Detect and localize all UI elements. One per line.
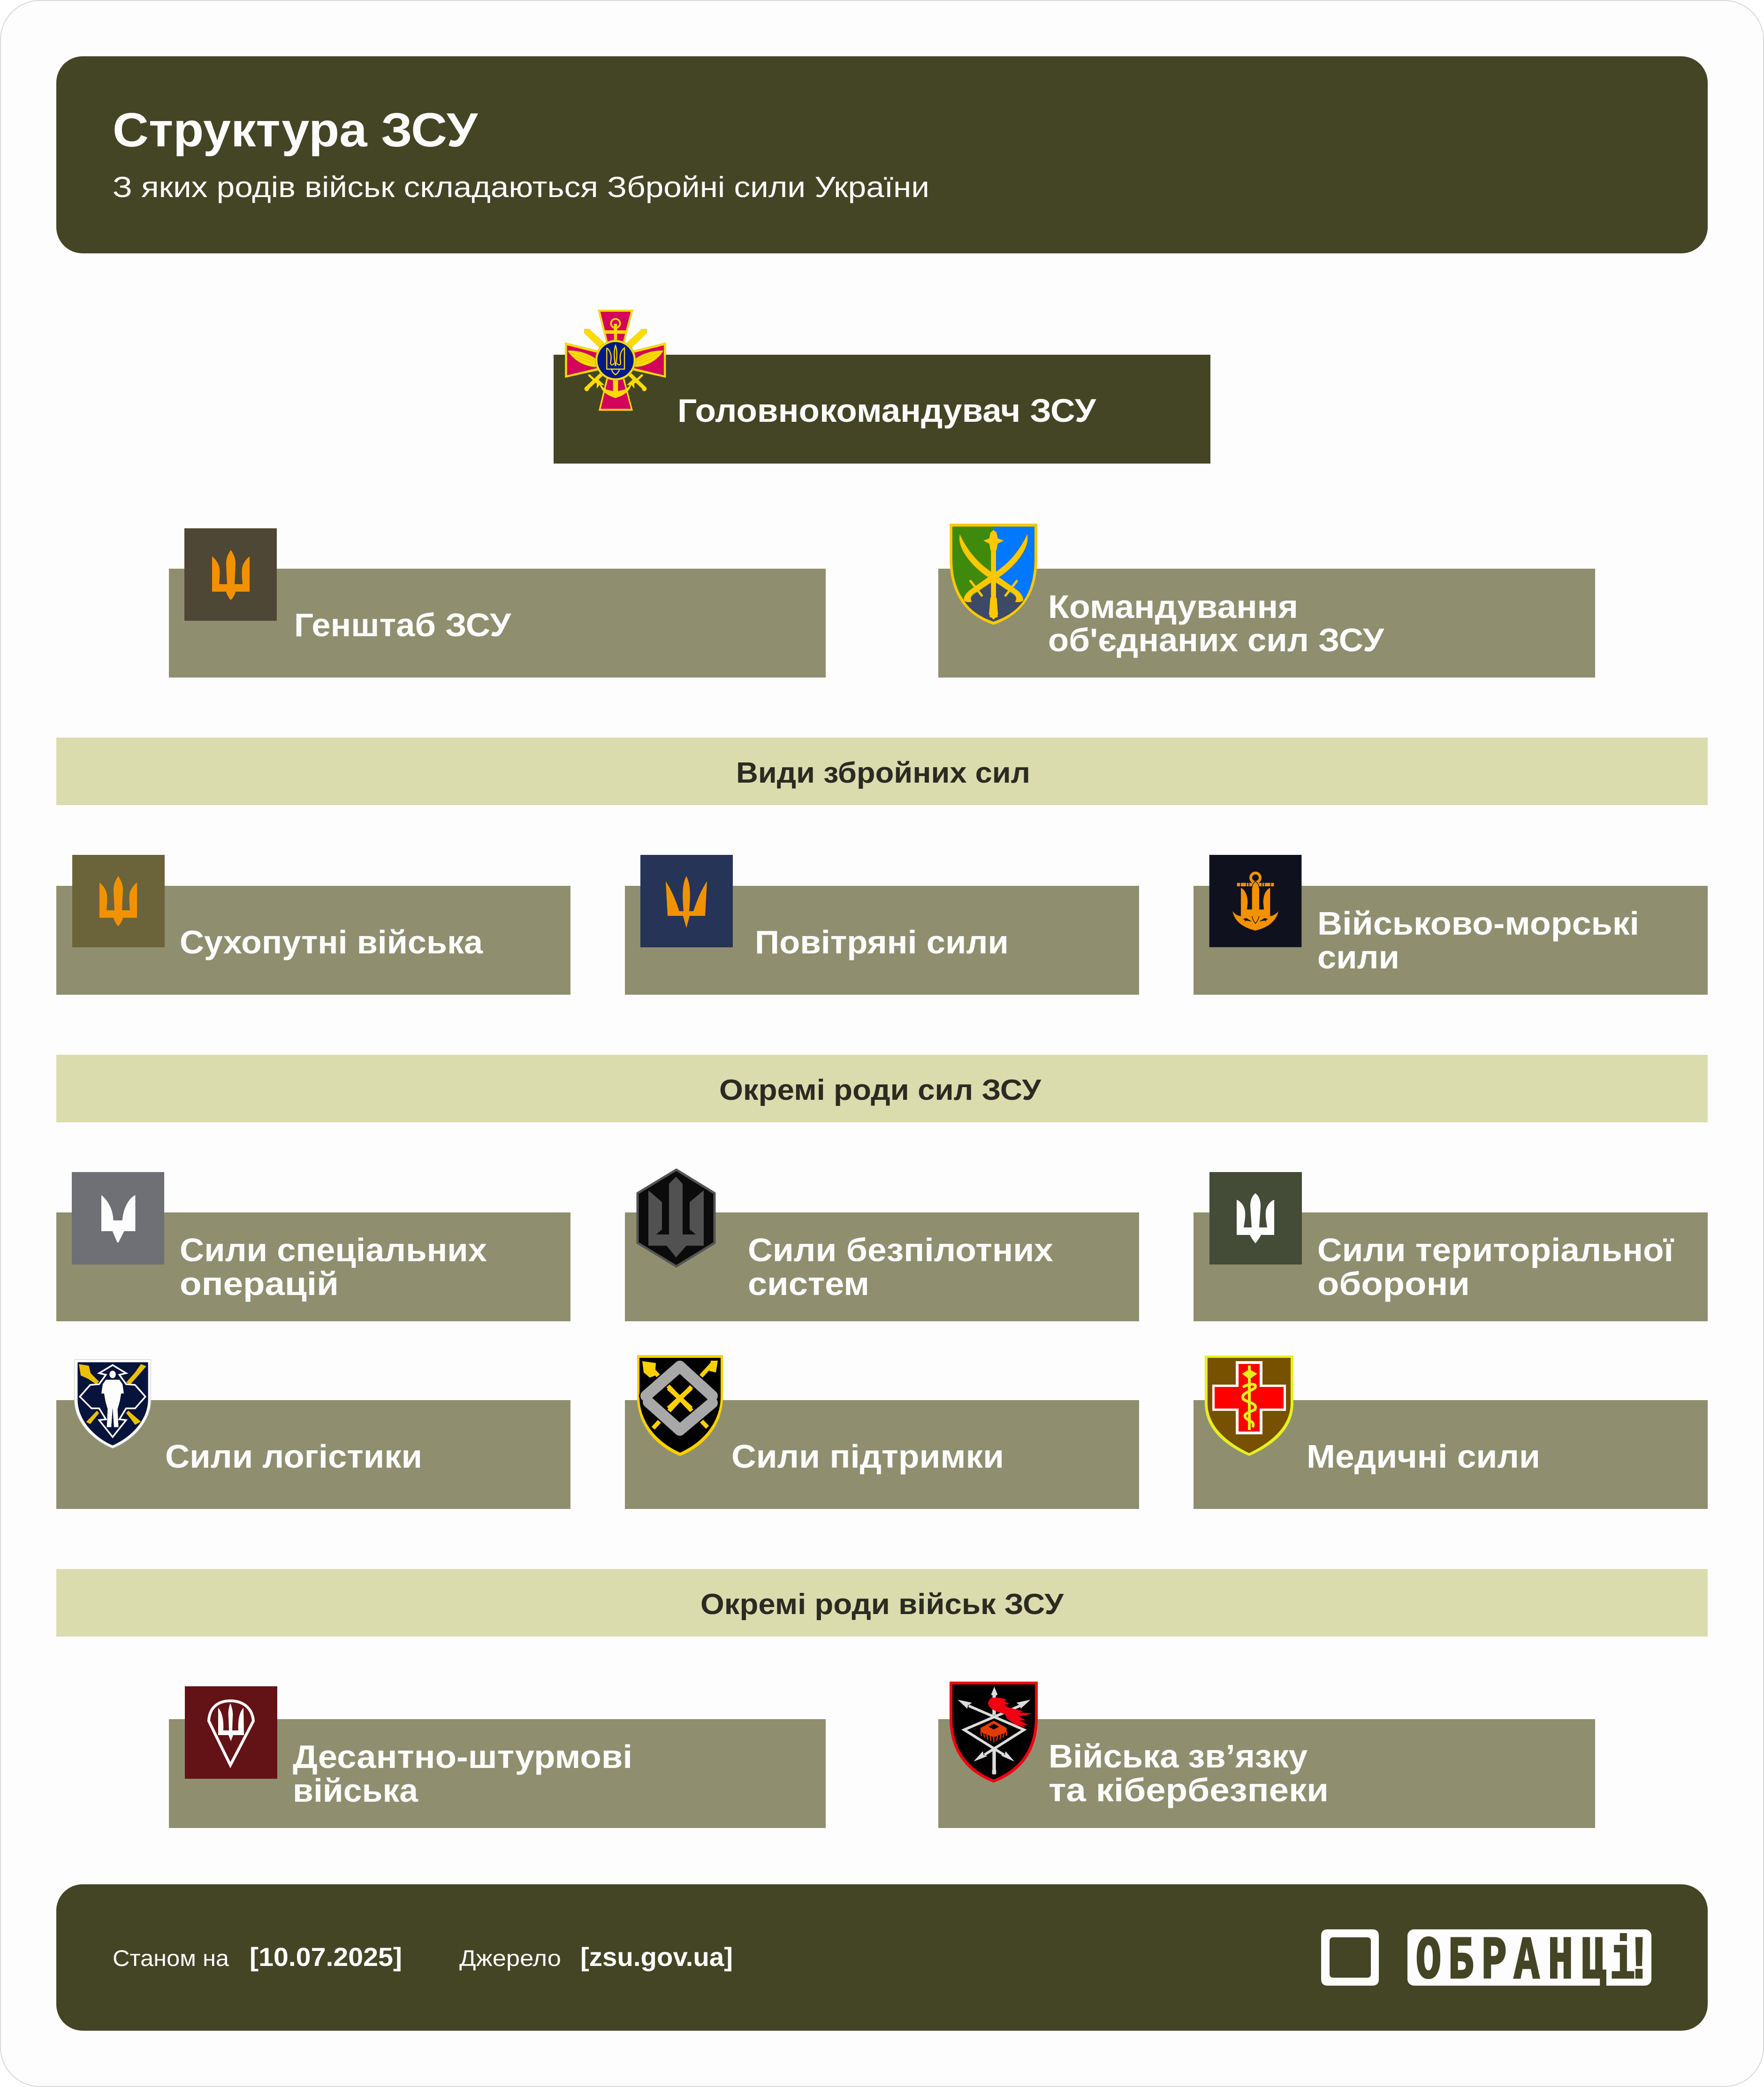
title: Структура ЗСУ — [113, 103, 479, 157]
joint forces label: Командування — [1048, 588, 1298, 625]
panel: logistics forces — [56, 1359, 570, 1509]
unmanned bar — [625, 1212, 1139, 1321]
panel: joint forces command — [938, 524, 1595, 678]
header banner — [56, 56, 1708, 253]
logistics label: Сили логістики — [165, 1438, 422, 1475]
territorial defence label: Сили територіальної — [1317, 1232, 1674, 1268]
logistics bar — [56, 1400, 570, 1509]
date value: [10.07.2025] — [250, 1942, 402, 1972]
territorial defence label line 2: оборони — [1317, 1265, 1470, 1302]
panel: support forces — [625, 1355, 1139, 1509]
communications bar — [938, 1719, 1595, 1828]
air assault bar — [169, 1719, 826, 1828]
source value: [zsu.gov.ua] — [580, 1942, 733, 1972]
general staff bar — [169, 569, 826, 678]
land forces bar — [56, 886, 570, 995]
icon: unmanned systems hexagon — [638, 1170, 715, 1266]
medical bar — [1194, 1400, 1708, 1509]
panel: navy — [1194, 855, 1708, 995]
source label: Джерело — [459, 1946, 561, 1971]
joint forces label line 2: об'єднаних сил ЗСУ — [1048, 622, 1385, 658]
joint forces bar — [938, 569, 1595, 678]
commander label: Головнокомандувач ЗСУ — [677, 392, 1097, 429]
panel: air assault forces — [169, 1686, 826, 1828]
section heading: separate branches of troops: Окремі роди військ ЗСУ — [700, 1588, 1064, 1621]
navy label line 2: сили — [1317, 939, 1399, 975]
header background — [56, 56, 1708, 253]
air assault label line 2: війська — [293, 1772, 418, 1809]
support bar — [625, 1400, 1139, 1509]
communications label: Війська зв’язку — [1049, 1738, 1308, 1775]
section heading: separate branches of troops — [56, 1569, 1708, 1637]
air assault label: Десантно-штурмові — [293, 1738, 632, 1775]
special ops label line 2: операцій — [180, 1265, 339, 1302]
icon: logo square — [1321, 1929, 1379, 1986]
medical label: Медичні сили — [1307, 1438, 1540, 1475]
section heading: separate branches of forces: Окремі роди сил ЗСУ — [719, 1074, 1042, 1106]
date label: Станом на — [113, 1946, 229, 1971]
icon: air assault parachute — [185, 1686, 277, 1779]
logo wordmark: ОБРАНЦі! — [1416, 1928, 1651, 1996]
support label: Сили підтримки — [731, 1438, 1004, 1475]
icon: territorial defence trident — [1209, 1172, 1302, 1264]
icon: communications shield — [950, 1682, 1038, 1782]
panel: general staff — [169, 528, 826, 678]
panel: unmanned systems forces — [625, 1170, 1139, 1321]
section heading: separate branches of forces — [56, 1055, 1708, 1122]
section heading: armed forces branches — [56, 738, 1708, 805]
icon: air force trident — [640, 855, 733, 947]
icon: general staff trident — [184, 528, 277, 621]
panel: commander in chief — [554, 310, 1210, 464]
unmanned label line 2: систем — [748, 1265, 869, 1302]
general staff label: Генштаб ЗСУ — [294, 607, 511, 643]
icon: joint forces shield — [950, 524, 1037, 625]
land forces label: Сухопутні війська — [180, 924, 483, 960]
panel: air force — [625, 855, 1139, 995]
territorial defence bar — [1194, 1212, 1708, 1321]
special ops label: Сили спеціальних — [180, 1232, 487, 1268]
footer banner — [56, 1884, 1708, 2031]
panel: medical forces — [1194, 1356, 1708, 1509]
panel: communications and cybersecurity troops — [938, 1682, 1595, 1828]
navy bar — [1194, 886, 1708, 995]
icon: medical shield — [1205, 1356, 1293, 1456]
icon: navy anchor trident — [1209, 855, 1301, 947]
panel: special operations forces — [56, 1172, 570, 1321]
section heading: armed forces branches: Види збройних сил — [736, 757, 1030, 789]
icon: commander cross emblem — [565, 310, 666, 411]
icon: support shield — [637, 1355, 723, 1456]
subtitle: З яких родів військ складаються Збройні сили України — [113, 171, 929, 204]
air force bar — [625, 886, 1139, 995]
footer background — [56, 1884, 1708, 2031]
air force label: Повітряні сили — [755, 924, 1009, 960]
panel: land forces — [56, 855, 570, 995]
commander bar — [554, 355, 1210, 464]
icon: logistics shield — [75, 1359, 151, 1448]
navy label: Військово-морські — [1317, 905, 1639, 942]
unmanned label: Сили безпілотних — [748, 1232, 1053, 1268]
icon: land forces trident — [72, 855, 165, 947]
communications label line 2: та кібербезпеки — [1049, 1772, 1329, 1808]
special ops bar — [56, 1212, 570, 1321]
icon: special ops trident — [72, 1172, 164, 1264]
panel: territorial defence forces — [1194, 1172, 1708, 1321]
